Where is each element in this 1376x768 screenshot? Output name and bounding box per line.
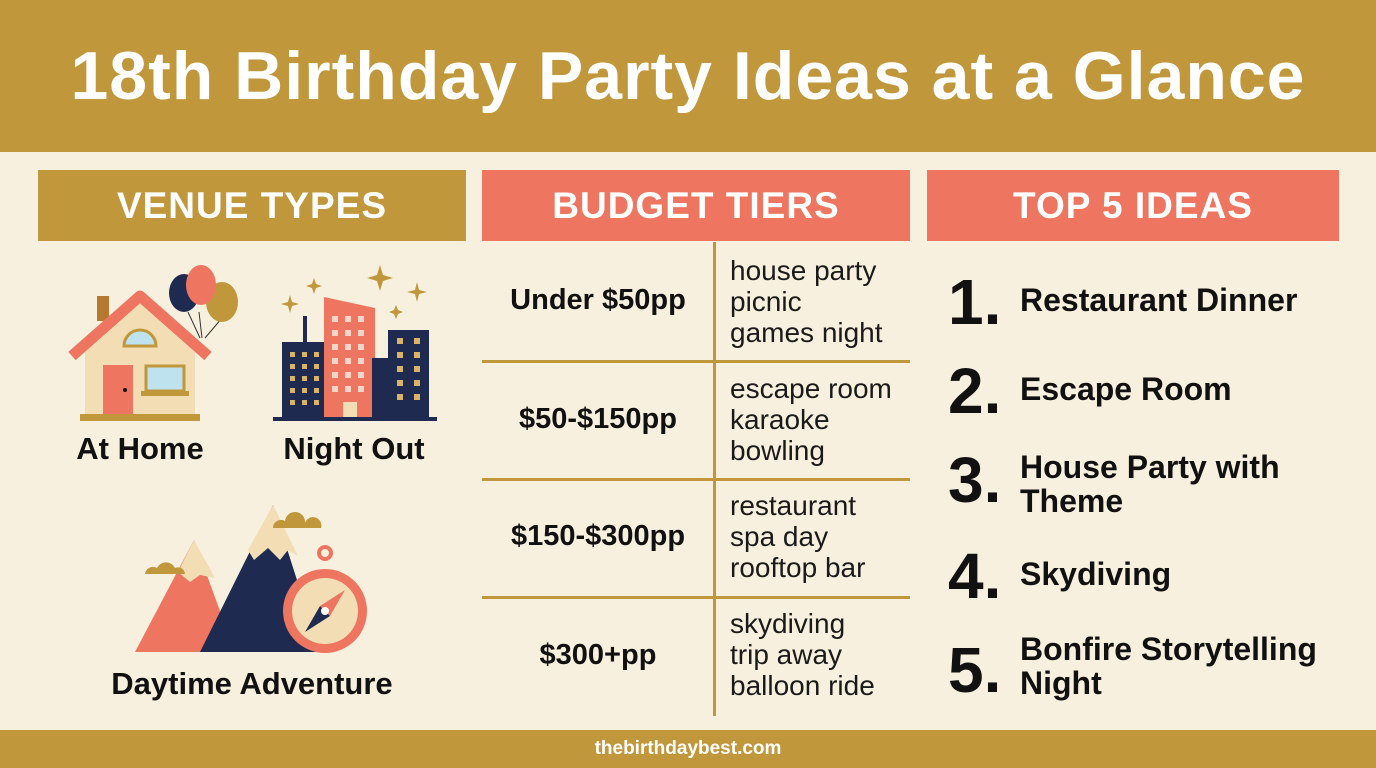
- tier 1 items: house party: [730, 255, 876, 286]
- icon: house: [72, 265, 238, 421]
- idea 2: 2.: [948, 355, 1001, 427]
- tier 4 items: skydiving: [730, 608, 845, 639]
- text: Night: [1020, 665, 1102, 701]
- heading: top 5 ideas: [927, 170, 1339, 241]
- label: daytime adventure: Daytime Adventure: [111, 666, 393, 701]
- footer: [0, 730, 1376, 768]
- tier 3 items: [730, 490, 865, 583]
- tier 1: Under $50pp: [510, 284, 686, 316]
- tier 3: $150-$300pp: [511, 520, 685, 552]
- tier 2 items: [730, 373, 892, 466]
- text: Escape Room: [1020, 371, 1232, 407]
- tier 2: $50-$150pp: [519, 403, 677, 435]
- heading: budget tiers: [482, 170, 910, 241]
- idea 3: 3.: [948, 444, 1001, 516]
- title banner: [0, 0, 1376, 152]
- footer: thebirthdaybest.com: [595, 738, 781, 759]
- text: Skydiving: [1020, 556, 1171, 592]
- tier 1 items: games night: [730, 317, 883, 348]
- heading: budget tiers: BUDGET TIERS: [552, 184, 840, 226]
- tier 4: $300+pp: [540, 639, 656, 671]
- tier 3 items: spa day: [730, 521, 828, 552]
- label: at home: At Home: [76, 431, 204, 466]
- tier 2 items: bowling: [730, 435, 825, 466]
- tier 1 items: [730, 255, 883, 348]
- tier 3 items: restaurant: [730, 490, 856, 521]
- panel: venue icons: [68, 265, 437, 653]
- text: Theme: [1020, 483, 1123, 519]
- idea 5: 5.: [948, 634, 1001, 706]
- icon: city skyline: [273, 265, 437, 421]
- idea 4: 4.: [948, 540, 1001, 612]
- tier 1 items: picnic: [730, 286, 802, 317]
- tier 4 items: balloon ride: [730, 670, 875, 701]
- text: Restaurant Dinner: [1020, 282, 1297, 318]
- tier 2 items: karaoke: [730, 404, 830, 435]
- tier 4 items: [730, 608, 875, 701]
- heading: venue types: [38, 170, 466, 241]
- table grid lines: [482, 242, 910, 716]
- icon: mountains and compass: [135, 505, 367, 653]
- tier 3 items: rooftop bar: [730, 552, 865, 583]
- heading: venue types: VENUE TYPES: [117, 184, 387, 226]
- idea 1: 1.: [948, 266, 1001, 338]
- heading: top 5 ideas: TOP 5 IDEAS: [1013, 184, 1253, 226]
- tier 2 items: escape room: [730, 373, 892, 404]
- tier 4 items: trip away: [730, 639, 842, 670]
- label: night out: Night Out: [283, 431, 425, 466]
- text: House Party with: [1020, 449, 1280, 485]
- title banner: 18th Birthday Party Ideas at a Glance: [70, 38, 1306, 114]
- text: Bonfire Storytelling: [1020, 631, 1317, 667]
